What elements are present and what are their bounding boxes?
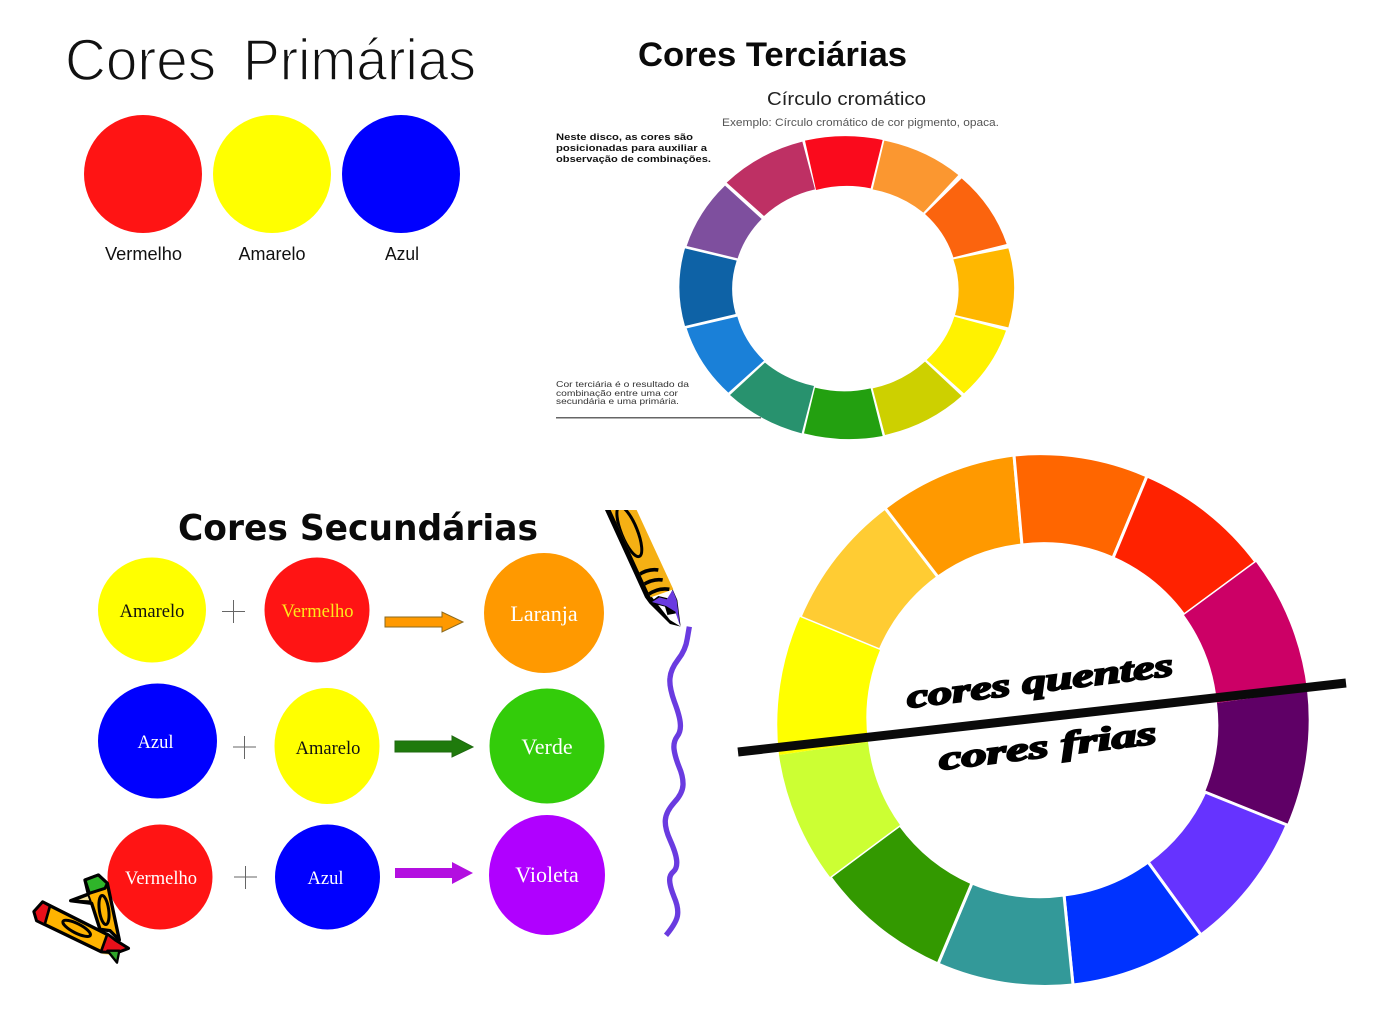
divider line [738, 683, 1346, 752]
row: laranja: Laranja [510, 601, 578, 626]
heading: cores primárias [65, 28, 476, 93]
row: laranja: Amarelo [120, 602, 184, 622]
pen body [605, 504, 681, 627]
heading: cores primárias: Primárias [243, 28, 476, 93]
circle: amarelo: Amarelo [238, 244, 306, 264]
row: verde: Verde [521, 734, 573, 759]
note: cor terciária: combinação entre uma cor [556, 388, 678, 398]
row: laranja: Vermelho [282, 602, 353, 622]
icon: pen with squiggle [605, 504, 689, 935]
circle: azul: Azul [385, 244, 419, 264]
label: cores frias: cores frias [937, 716, 1158, 778]
row: violeta: Vermelho [125, 869, 197, 889]
wheel segments [777, 454, 1309, 986]
row: violeta: Violeta [515, 862, 579, 887]
row: violeta [108, 815, 605, 935]
heading: cores secundárias: Cores Secundárias [178, 508, 538, 549]
note: disco: Neste disco, as cores são [556, 132, 693, 143]
row: verde: Amarelo [296, 739, 360, 759]
crayon: lying [34, 902, 128, 963]
note: disco [556, 132, 711, 165]
label: cores quentes: cores quentes [905, 648, 1175, 716]
chart: cores quentes e frias [738, 454, 1346, 986]
note: cor terciária [556, 379, 761, 418]
crayon: upright [71, 875, 119, 940]
circle: vermelho: Vermelho [105, 244, 182, 264]
wheel title: Círculo cromático [767, 89, 926, 109]
panel: cores secundárias [98, 508, 605, 935]
panel: cores terciárias [556, 36, 1014, 439]
icon: crayons [34, 875, 128, 963]
heading: cores terciárias: Cores Terciárias [638, 36, 907, 74]
circle: vermelho [84, 115, 202, 264]
row: verde: Azul [138, 733, 173, 753]
wheel subtitle: Exemplo: Círculo cromático de cor pigmento, opaca. [722, 117, 999, 129]
heading: cores primárias: Cores [65, 28, 216, 93]
note: disco: observação de combinações. [556, 154, 711, 165]
note: disco: posicionadas para auxiliar a [556, 143, 708, 154]
chart: círculo cromático [679, 136, 1014, 439]
row: violeta: Azul [308, 869, 343, 889]
panel: cores primárias [65, 28, 476, 264]
note: cor terciária: Cor terciária é o resultado da [556, 379, 689, 389]
circle: amarelo [213, 115, 331, 264]
row: verde [98, 684, 604, 804]
circle: azul [342, 115, 460, 264]
row: laranja [98, 553, 604, 673]
purple squiggle [665, 627, 689, 935]
note: cor terciária: secundária e uma primária. [556, 396, 679, 406]
